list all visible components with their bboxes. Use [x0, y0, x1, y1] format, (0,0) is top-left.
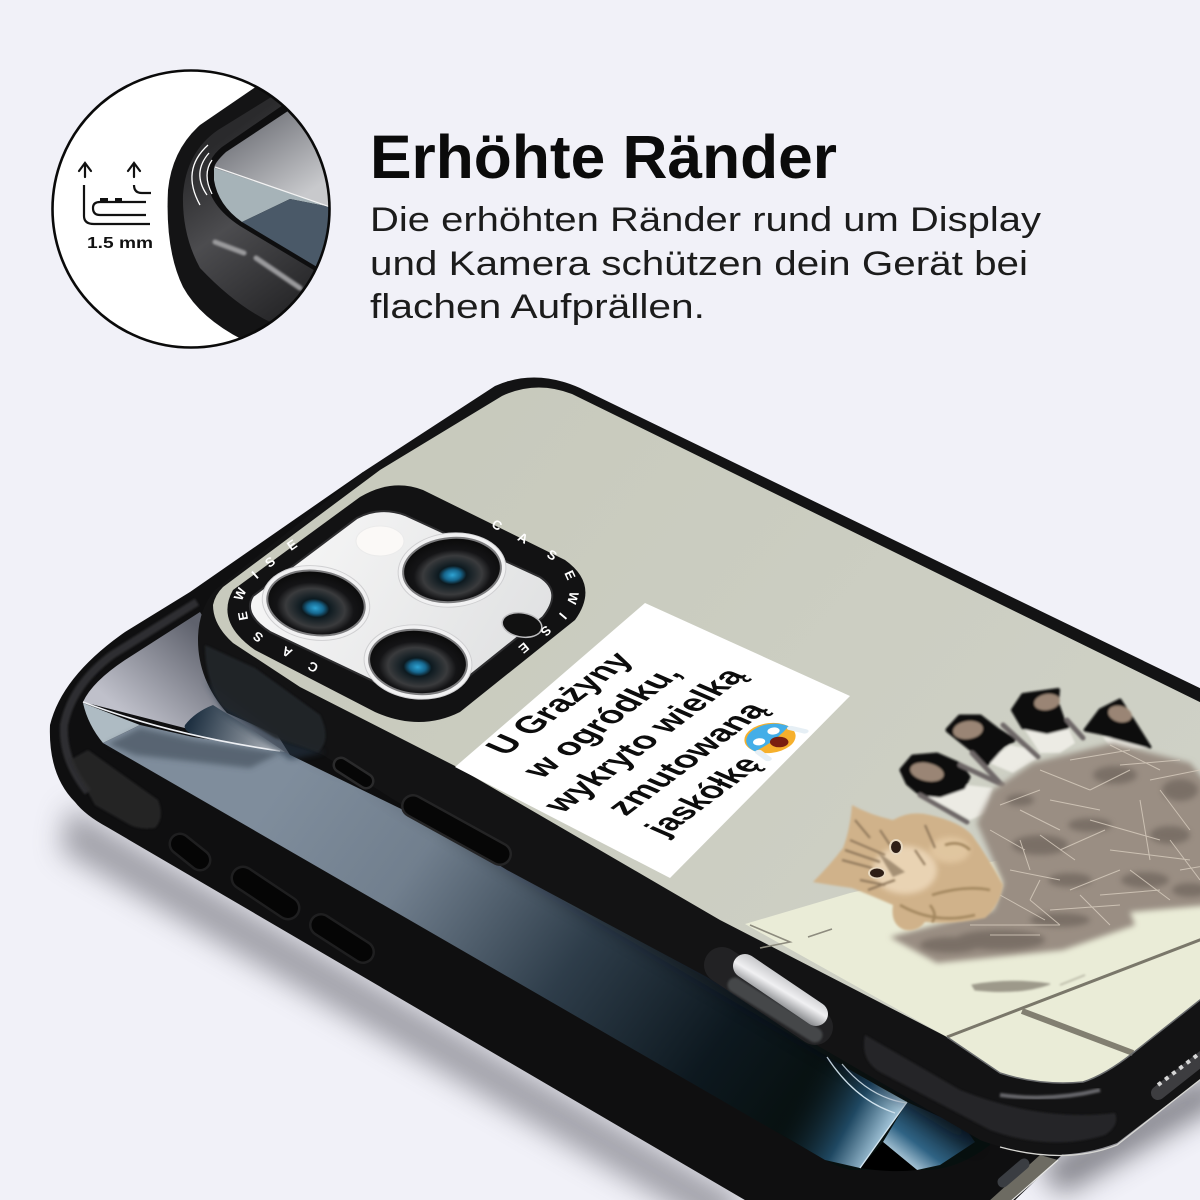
floor smudges	[972, 975, 1085, 992]
cat	[813, 805, 1003, 930]
volume up button	[243, 878, 288, 908]
lower phone screen: light blue reflection	[83, 703, 140, 743]
floor line short	[1022, 1011, 1133, 1053]
cat face stripes	[842, 820, 935, 890]
sticker text: wykryto wielką	[533, 663, 754, 818]
ring brand text: I	[249, 568, 261, 582]
sticker text: w ogródku,	[513, 661, 690, 783]
side tint near lens	[205, 680, 325, 760]
lower phone bumper patch	[70, 750, 161, 829]
ring brand text: I	[556, 610, 570, 622]
ring brand text: A	[515, 529, 531, 547]
cat eye 2	[868, 867, 886, 879]
ring brand text: W	[564, 590, 582, 607]
reflection arc	[83, 702, 280, 751]
cat chest fur	[930, 837, 970, 863]
ring brand text: C	[305, 658, 321, 676]
description text: und Kamera schützen dein Gerät bei	[370, 245, 1028, 283]
lower phone	[50, 472, 1062, 1200]
speaker port	[1158, 1052, 1200, 1093]
birds	[902, 690, 1150, 822]
cat paw shading	[900, 843, 990, 922]
ring brand text: E	[561, 568, 579, 582]
cat eye 1	[889, 839, 903, 855]
inset: raised edge detail circle	[52, 70, 340, 348]
ring brand text: S	[544, 546, 560, 564]
ring brand text: S	[262, 553, 278, 571]
wallpaper blue left	[740, 1040, 907, 1168]
lower phone case body	[50, 472, 1062, 1200]
nest twigs	[970, 745, 1200, 935]
ring brand text: E	[516, 639, 532, 657]
lower phone screen: grey reflection	[83, 612, 290, 755]
silent switch	[341, 765, 366, 781]
icon: impact arcs	[192, 145, 212, 205]
upper phone shadow on screen	[215, 705, 980, 1150]
upper phone case body	[198, 377, 1200, 1155]
cat nose	[878, 852, 905, 877]
silver action button	[745, 966, 816, 1014]
sticker text: zmutowaną	[597, 697, 776, 820]
case highlight rim	[64, 602, 197, 792]
ring brand text: S	[250, 628, 266, 646]
bird 2	[948, 717, 1040, 783]
dark upper edge of main panel	[108, 728, 280, 768]
nest	[890, 743, 1200, 963]
lower edge strip	[988, 1155, 1058, 1200]
ring brand text: E	[284, 536, 300, 554]
rim gloss	[1000, 1090, 1100, 1098]
charging port cavity	[722, 965, 815, 1035]
floor ticks	[750, 925, 832, 948]
case rim edge shine	[947, 992, 1200, 1083]
bird 3	[1013, 690, 1083, 753]
sticker text: U Grażyny	[477, 647, 642, 759]
cat fur silhouette	[813, 805, 1003, 930]
sticker text: jaskółkę	[636, 752, 770, 841]
dark navy wedge	[185, 705, 285, 752]
sticker	[455, 603, 850, 878]
ring brand text	[231, 516, 582, 676]
label: 1.5 mm: 1.5 mm	[87, 235, 153, 252]
lower corner bumper patch	[864, 1035, 1116, 1142]
cam island inner plate	[250, 511, 552, 694]
streak lines	[827, 1057, 907, 1168]
speaker grille	[1158, 1053, 1200, 1085]
ring brand text: S	[537, 623, 554, 640]
bird 1	[902, 755, 1003, 822]
volume down button	[321, 925, 363, 952]
power button	[180, 844, 200, 860]
cam island ring	[227, 485, 585, 722]
shadow right of phones	[1040, 1072, 1200, 1195]
circle outline	[52, 70, 330, 348]
shadow below lower phone	[60, 806, 745, 1200]
ring brand text: E	[235, 610, 251, 622]
lidar sensor	[500, 610, 544, 640]
lower phone screen: main panel	[103, 725, 1000, 1170]
black triangle in wallpaper	[860, 1142, 917, 1171]
ring brand text: C	[489, 516, 505, 534]
icon: raised edges diagram	[79, 163, 151, 224]
cat light fur	[873, 846, 937, 894]
bird 4	[1085, 700, 1150, 750]
description text: flachen Aufprällen.	[370, 288, 705, 326]
bottom edge shine	[1000, 1072, 1200, 1156]
wallpaper blue right	[883, 1102, 975, 1170]
lower edge shine	[1010, 1160, 1058, 1200]
ring brand text: A	[279, 643, 295, 661]
floor line long	[947, 936, 1200, 1037]
description text	[370, 201, 1041, 326]
side button	[413, 806, 500, 854]
title: Erhöhte Ränder	[370, 123, 837, 191]
ring brand text: W	[231, 585, 250, 603]
phone corner close-up	[168, 86, 340, 340]
flash	[356, 526, 404, 556]
lens 2	[395, 528, 509, 612]
frame small port	[1003, 1164, 1024, 1182]
emoji: scared face	[732, 716, 808, 760]
lens 3	[361, 620, 475, 704]
back face	[213, 387, 1200, 1083]
nest mass	[890, 743, 1200, 963]
upper phone	[198, 377, 1200, 1156]
lens 1	[257, 559, 375, 647]
sticker text	[449, 626, 839, 854]
bumper patch near camera	[205, 645, 326, 752]
description text: Die erhöhten Ränder rund um Display	[370, 201, 1041, 239]
nest shading	[920, 766, 1200, 953]
cream floor	[745, 860, 1200, 1083]
